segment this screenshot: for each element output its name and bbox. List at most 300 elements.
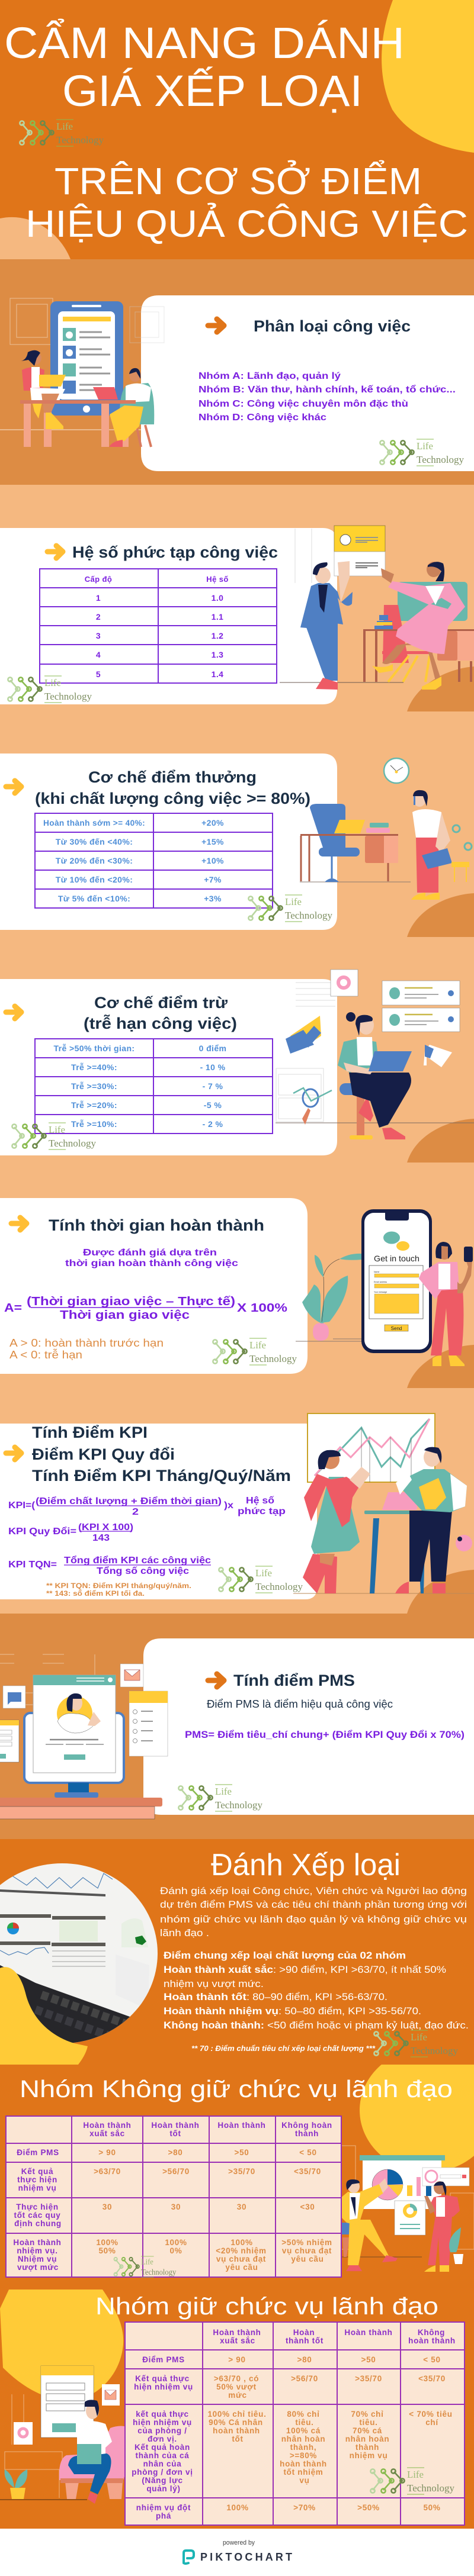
heading: Nhóm giữ chức vụ lãnh đạo: [95, 2292, 438, 2320]
table: 1: [96, 593, 101, 603]
table: nhiệm vụ: [350, 2451, 387, 2460]
table: 1.4: [212, 669, 223, 679]
table: Nhiệm vụ: [18, 2255, 57, 2263]
heading: Tính thời gian hoàn thành: [49, 1216, 264, 1234]
table: xuất sắc: [220, 2336, 255, 2345]
intro paragraph: lãnh đạo .: [160, 1927, 209, 1939]
logo: [213, 1338, 297, 1365]
table: +7%: [204, 875, 222, 884]
table: Hoàn thành: [83, 2121, 132, 2130]
arrow: [208, 319, 224, 332]
logo: [12, 1123, 96, 1149]
formula: KPI: KPI=(: [8, 1500, 36, 1511]
table: vụ chưa đạt: [282, 2246, 332, 2255]
formula: converted KPI: 143: [92, 1533, 110, 1543]
table: <30: [300, 2203, 315, 2211]
formula: Thời gian giao việc: [60, 1309, 190, 1322]
footer: powered by Piktochart: PIKTOCHART: [200, 2551, 292, 2563]
table: tiêu.: [359, 2418, 378, 2427]
table: 70% chỉ: [351, 2410, 384, 2419]
section background: light peach: [0, 485, 474, 1614]
table: 100%: [230, 2238, 253, 2247]
formula: converted KPI: [8, 1522, 133, 1543]
table: tốt các quy: [14, 2211, 60, 2220]
table: kết quả thực: [136, 2410, 189, 2419]
table: [40, 569, 277, 683]
formula: KPI: phức tạp: [238, 1506, 286, 1516]
logo: Life: [411, 2031, 427, 2043]
table: >50% nhiệm: [281, 2238, 332, 2247]
table: nhân của: [143, 2459, 181, 2468]
logo: [374, 2030, 458, 2057]
table: Không: [418, 2328, 445, 2337]
panel background: [0, 528, 337, 704]
table: 100%: [165, 2238, 187, 2247]
table: > 90: [98, 2148, 116, 2157]
table: +3%: [204, 894, 222, 903]
description: Được đánh giá dựa trên: [83, 1248, 217, 1258]
criteria list: <50 điểm hoặc vi phạm kỷ luật, đạo đức.: [267, 2020, 469, 2031]
table: Từ 10% đến <20%:: [56, 875, 133, 884]
logo: Life: [49, 1124, 65, 1135]
table: thành: [356, 2443, 379, 2452]
table: vụ: [299, 2476, 310, 2485]
table: thực hiện: [17, 2175, 57, 2184]
formula: KPI: Hệ số: [246, 1496, 274, 1506]
table: [125, 2322, 465, 2525]
formula: KPI: )x: [224, 1500, 233, 1511]
criteria list: : 80–90 điểm, KPI >56-63/70.: [246, 1991, 387, 2002]
table: >50: [235, 2148, 249, 2157]
illustration: two people with chart: [293, 1413, 474, 1593]
table: 70% cá: [353, 2426, 382, 2435]
intro paragraph: nhóm giữ chức vụ lãnh đạo quản lý và không giữ chức vụ: [160, 1914, 467, 1925]
table: [35, 1039, 273, 1134]
panel: penalty mechanism: [0, 970, 474, 1155]
table: 2: [96, 612, 101, 622]
criteria list: Không hoàn thành:: [164, 2020, 264, 2031]
heading: Cơ chế điểm trừ: [94, 994, 228, 1012]
logo: [219, 1566, 303, 1593]
footer: powered by Piktochart: powered by: [223, 2539, 255, 2546]
illustration: man and woman in office: [280, 526, 474, 690]
table: thành của cá: [136, 2451, 189, 2460]
logo: Life: [141, 2257, 153, 2266]
formula: KPI TQN: Tổng số công việc: [97, 1566, 189, 1576]
logo: Technology: [417, 454, 464, 465]
table: 1.3: [212, 650, 223, 659]
legend: [9, 1337, 164, 1361]
table: Từ 5% đến <10%:: [58, 894, 130, 903]
table: 80% chỉ: [287, 2410, 320, 2419]
table: Hoàn thành: [344, 2328, 393, 2337]
formula: A=: [4, 1302, 22, 1315]
section background: tan band: [0, 259, 474, 485]
table: 1.0: [212, 593, 223, 603]
table: 0%: [170, 2246, 182, 2255]
table: Từ 20% đến <30%:: [56, 856, 133, 865]
heading: Đánh Xếp loại: [211, 1848, 401, 1882]
table: hiện nhiệm vụ: [133, 2418, 192, 2427]
table: nhiệm vụ: [18, 2184, 56, 2192]
heading: [35, 768, 310, 807]
table: >63/70: [94, 2167, 121, 2176]
table: tốt nhiệm: [283, 2468, 324, 2477]
description: thời gian hoàn thành công việc: [65, 1258, 238, 1268]
title: [4, 18, 468, 245]
table: Điểm PMS: [17, 2148, 59, 2157]
yellow blob: [0, 2290, 123, 2401]
logo: Technology: [215, 1799, 262, 1811]
table: +10%: [201, 856, 224, 865]
table: 100% chỉ tiêu.: [207, 2410, 267, 2419]
table: >50%: [357, 2503, 380, 2512]
table: Hoàn thành: [13, 2238, 62, 2247]
table: 90% Cá nhân: [209, 2418, 263, 2427]
heading: Tính Điểm KPI Tháng/Quý/Năm: [32, 1467, 291, 1485]
table: Hoàn: [293, 2328, 315, 2337]
illustration: phone contact form: Name: [374, 1271, 379, 1273]
illustration: phone contact form: Get in touch: [374, 1254, 419, 1263]
panel: complexity coefficient: [0, 526, 474, 704]
table: phòng / đơn vị: [132, 2468, 193, 2477]
illustration: phone contact form: [296, 1209, 473, 1366]
formula: KPI: [8, 1496, 286, 1517]
panel background: [141, 295, 474, 471]
table: Kết quả hoàn: [134, 2443, 190, 2452]
group list: Nhóm C: Công việc chuyên môn đặc thù: [198, 399, 408, 409]
hill: section 3: [407, 666, 474, 711]
logo: [8, 676, 92, 703]
table: 0 điểm: [199, 1044, 226, 1053]
table: tốt: [232, 2435, 244, 2443]
logo: Technology: [407, 2482, 454, 2494]
logo: Technology: [141, 2268, 177, 2276]
formula: KPI TQN: KPI TQN=: [8, 1560, 57, 1570]
panel: bonus mechanism: [0, 754, 472, 930]
group list: Nhóm B: Văn thư, hành chính, kế toán, tổ chức...: [198, 384, 456, 395]
footnotes: [46, 1582, 191, 1598]
intro paragraph: Đánh giá xếp loại Công chức, Viên chức và Người lao động: [160, 1885, 467, 1896]
table: >70%: [293, 2503, 316, 2512]
table: 1.1: [212, 612, 223, 622]
section background: header orange: [0, 0, 474, 259]
logo: [380, 439, 464, 466]
logo: Technology: [44, 691, 92, 702]
formula: converted KPI: KPI Quy Đổi=: [8, 1526, 76, 1537]
logo: [370, 2468, 454, 2494]
panel: PMS: [0, 1638, 474, 1819]
table: Trễ >=20%:: [71, 1100, 117, 1110]
table: định chung: [14, 2219, 62, 2228]
illustration: man on armchair: [0, 2366, 130, 2504]
formula: converted KPI: (KPI X 100): [78, 1522, 133, 1532]
footnotes: ** KPI TQN: Điểm KPI tháng/quý/năm.: [46, 1582, 191, 1590]
table: >56/70: [162, 2167, 190, 2176]
table: Từ 30% đến <40%:: [56, 837, 133, 846]
formula: X 100%: [237, 1302, 287, 1315]
panel background: [0, 1198, 308, 1374]
illustration: phone contact form: Your message: [374, 1291, 387, 1293]
table: 100%: [226, 2503, 249, 2512]
group list: [198, 371, 456, 423]
table: >35/70: [355, 2374, 382, 2383]
table: -5 %: [204, 1100, 222, 1110]
heading: Phân loại công việc: [254, 317, 411, 335]
table: 1.2: [212, 631, 223, 640]
table: hoàn thành: [213, 2426, 260, 2435]
intro paragraph: [160, 1885, 467, 1939]
table: +15%: [201, 837, 224, 846]
panel background: [0, 979, 337, 1155]
table: đơn vị.: [148, 2435, 177, 2443]
panel: non-leadership group: [5, 2065, 474, 2278]
hill: section 5: [407, 1119, 474, 1163]
title: HIỆU QUẢ CÔNG VIỆC: [25, 202, 468, 245]
table: nhân hoàn: [281, 2435, 325, 2443]
section background: white footer: [0, 2529, 474, 2576]
table: - 2 %: [203, 1119, 223, 1129]
logo: Life: [249, 1339, 266, 1351]
table: Hoàn thành sớm >= 40%:: [43, 818, 145, 827]
table: Trễ >=10%:: [71, 1119, 117, 1129]
table: >63/70 , có: [214, 2374, 259, 2383]
formula: KPI TQN: [8, 1555, 211, 1576]
intro paragraph: dự trên điểm PMS và các tiêu chí thành phần tương ứng với: [160, 1899, 467, 1910]
table: thành: [295, 2129, 319, 2138]
criteria list: Hoàn thành tốt: [164, 1991, 246, 2002]
table: - 10 %: [200, 1062, 226, 1072]
title: TRÊN CƠ SỞ ĐIỂM: [55, 159, 422, 202]
heading: Hệ số phức tạp công việc: [72, 543, 278, 561]
table: <35/70: [418, 2374, 446, 2383]
table: Hoàn thành: [151, 2121, 200, 2130]
table: 50% vượt: [216, 2382, 257, 2391]
formula: [4, 1295, 287, 1322]
group list: Nhóm D: Công việc khác: [198, 413, 326, 423]
panel: job classification: [0, 295, 474, 471]
table: hoàn thành: [280, 2459, 327, 2468]
illustration: monitor with profile: [0, 1654, 168, 1819]
logo: Life: [255, 1567, 272, 1579]
table: Kết quả: [21, 2167, 53, 2176]
table: > 90: [228, 2355, 246, 2364]
table: quản lý): [146, 2484, 181, 2493]
formula: KPI: 2: [132, 1507, 139, 1517]
footer: powered by Piktochart: [184, 2539, 292, 2564]
table: >80: [168, 2148, 182, 2157]
table: tốt: [169, 2129, 181, 2138]
heading: [32, 1424, 291, 1485]
table: [6, 2116, 341, 2277]
logo: Technology: [285, 910, 332, 921]
footnotes: ** 143: số điểm KPI tối đa.: [46, 1589, 145, 1598]
section background: tan band lower: [0, 1614, 474, 1839]
table: Hệ số: [206, 575, 229, 584]
table: Không hoàn: [281, 2121, 332, 2130]
logo: Technology: [249, 1353, 297, 1364]
heading: Tính Điểm KPI: [32, 1424, 148, 1441]
table: xuất sắc: [89, 2129, 125, 2138]
table: Trễ >50% thời gian:: [54, 1044, 134, 1053]
hill: section 4: [407, 893, 474, 937]
table: >50: [361, 2355, 376, 2364]
logo: [248, 895, 332, 922]
illustration: man with briefcase at desk: [300, 758, 472, 900]
heading: [84, 994, 237, 1032]
criteria list: : 50–80 điểm, KPI >35-56/70.: [278, 2005, 421, 2017]
table: [35, 813, 273, 908]
table: chí: [425, 2418, 438, 2427]
logo: Technology: [49, 1138, 96, 1149]
table: >80: [297, 2355, 312, 2364]
legend: A > 0: hoàn thành trước hạn: [9, 1337, 164, 1349]
table: yêu cầu: [291, 2255, 324, 2263]
panel background: [143, 1638, 474, 1815]
table: Kết quả thực: [135, 2374, 190, 2383]
illustration: people at big phone: [0, 298, 164, 447]
table: hoàn thành: [408, 2336, 456, 2345]
arrow: [47, 546, 63, 558]
heading: Tính điểm PMS: [233, 1672, 355, 1689]
table: 3: [96, 631, 101, 640]
table: thành tốt: [286, 2336, 324, 2345]
table: thành,: [290, 2443, 316, 2452]
heading: Nhóm Không giữ chức vụ lãnh đạo: [20, 2075, 453, 2102]
table: 50%: [423, 2503, 441, 2512]
yellow blob: [0, 1967, 88, 2065]
logo: header: Life: [56, 121, 73, 132]
formula: KPI TQN: Tổng điểm KPI các công việc: [64, 1555, 211, 1566]
table: Trễ >=30%:: [71, 1081, 117, 1091]
table: 5: [96, 669, 101, 679]
logo: Technology: [411, 2045, 458, 2056]
logo: Life: [44, 677, 61, 688]
table: nhiệm vụ đột: [136, 2503, 191, 2512]
icon: piktochart mark: [184, 2551, 194, 2564]
criteria list: Hoàn thành nhiệm vụ: [164, 2005, 278, 2017]
table: Thực hiện: [16, 2203, 59, 2211]
table: Trễ >=40%:: [71, 1062, 117, 1072]
title: GIÁ XẾP LOẠI: [62, 66, 363, 115]
arrow: [11, 1218, 27, 1230]
table: 50%: [98, 2246, 116, 2255]
decorative peach blob: [0, 217, 71, 259]
logo: Life: [285, 896, 302, 907]
hill: section 6: [407, 1345, 474, 1388]
table: Điểm PMS: [142, 2355, 185, 2364]
table: nhân hoàn: [345, 2435, 389, 2443]
formula: (Thời gian giao việc – Thực tế): [27, 1295, 235, 1308]
title: CẨM NANG DÁNH: [4, 18, 405, 67]
table: hiện nhiệm vụ: [134, 2382, 193, 2391]
formula: KPI: (Điểm chất lượng + Điểm thời gian): [36, 1496, 222, 1506]
table: < 50: [299, 2148, 317, 2157]
table: 4: [96, 650, 101, 659]
legend: A < 0: trễ hạn: [9, 1348, 82, 1361]
panel background: [0, 754, 337, 930]
table: 100%: [96, 2238, 118, 2247]
heading: Cơ chế điểm thưởng: [88, 768, 257, 786]
table: vượt mức: [17, 2263, 59, 2272]
illustration: woman with laptop: [276, 970, 474, 1139]
description: [65, 1248, 238, 1268]
arrow: [6, 781, 21, 793]
table: Hoàn thành: [217, 2121, 266, 2130]
logo: header: Technology: [56, 134, 104, 146]
logo: header: [20, 120, 104, 146]
table: <35/70: [294, 2167, 321, 2176]
section background: orange lower: [0, 1839, 474, 2529]
yellow blob: [360, 2065, 474, 2168]
table: <20% nhiệm: [216, 2246, 267, 2255]
criteria list: Hoàn thành xuất sắc: [164, 1964, 273, 1975]
criteria list: Điểm chung xếp loại chất lượng của 02 nhóm: [164, 1950, 406, 1961]
table: của phòng /: [137, 2426, 187, 2435]
table: >=80%: [290, 2451, 317, 2460]
footnote: ** 70 : Điểm chuẩn tiêu chí xếp loại chất lượng ***: [191, 2044, 376, 2053]
criteria list: [164, 1950, 469, 2031]
logo: Life: [407, 2469, 424, 2480]
table: vụ chưa đạt: [216, 2255, 266, 2263]
table: 100% cá: [286, 2426, 321, 2435]
decorative yellow blob top right: [382, 0, 474, 153]
table: mức: [228, 2391, 247, 2400]
table: +20%: [201, 818, 224, 827]
illustration: phone contact form: Email address: [374, 1281, 387, 1283]
illustration: phone contact form: Send: [391, 1326, 402, 1331]
logo: Technology: [255, 1581, 303, 1592]
group list: Nhóm A: Lãnh đạo, quản lý: [198, 371, 341, 381]
table: 30: [171, 2203, 181, 2211]
table: yêu cầu: [225, 2263, 258, 2272]
criteria list: : >90 điểm, KPI >63/70, ít nhất 50%: [273, 1964, 446, 1975]
heading: (khi chất lượng công việc >= 80%): [35, 790, 310, 807]
table: (Năng lực: [142, 2476, 183, 2485]
arrow: [6, 1006, 21, 1019]
photo: analytics dashboard on laptop: [0, 1863, 158, 2043]
table: phá: [156, 2511, 171, 2520]
arrow: [208, 1674, 224, 1687]
logo: Life: [417, 440, 433, 452]
table: Cấp độ: [85, 575, 112, 584]
criteria list: nhiệm vụ vượt mức.: [164, 1978, 264, 1989]
panel: ranking: [0, 1848, 469, 2065]
table: nhiệm vụ.: [17, 2246, 58, 2255]
table: >35/70: [228, 2167, 255, 2176]
table: tiêu.: [295, 2418, 314, 2427]
panel: leadership group: [0, 2290, 465, 2525]
table: Hoàn thành: [213, 2328, 261, 2337]
panel: KPI: [0, 1413, 474, 1599]
table: 30: [103, 2203, 112, 2211]
logo: [178, 1785, 262, 1811]
panel background: [0, 1424, 317, 1599]
panel: completion time: [0, 1198, 473, 1374]
heading: Điểm KPI Quy đổi: [32, 1445, 175, 1463]
table: >56/70: [291, 2374, 318, 2383]
logo: Life: [215, 1786, 232, 1797]
table: 30: [237, 2203, 246, 2211]
arrow: [6, 1447, 21, 1460]
description: Điểm PMS là điểm hiệu quả công việc: [207, 1698, 393, 1710]
heading: (trễ hạn công việc): [84, 1014, 237, 1032]
table: < 50: [423, 2355, 441, 2364]
logo: [114, 2256, 177, 2277]
table: - 7 %: [203, 1081, 223, 1091]
formula: PMS= Điểm tiêu_chí chung+ (Điểm KPI Quy Đổi x 70%): [185, 1729, 465, 1740]
hill: section 7: [407, 1570, 474, 1614]
